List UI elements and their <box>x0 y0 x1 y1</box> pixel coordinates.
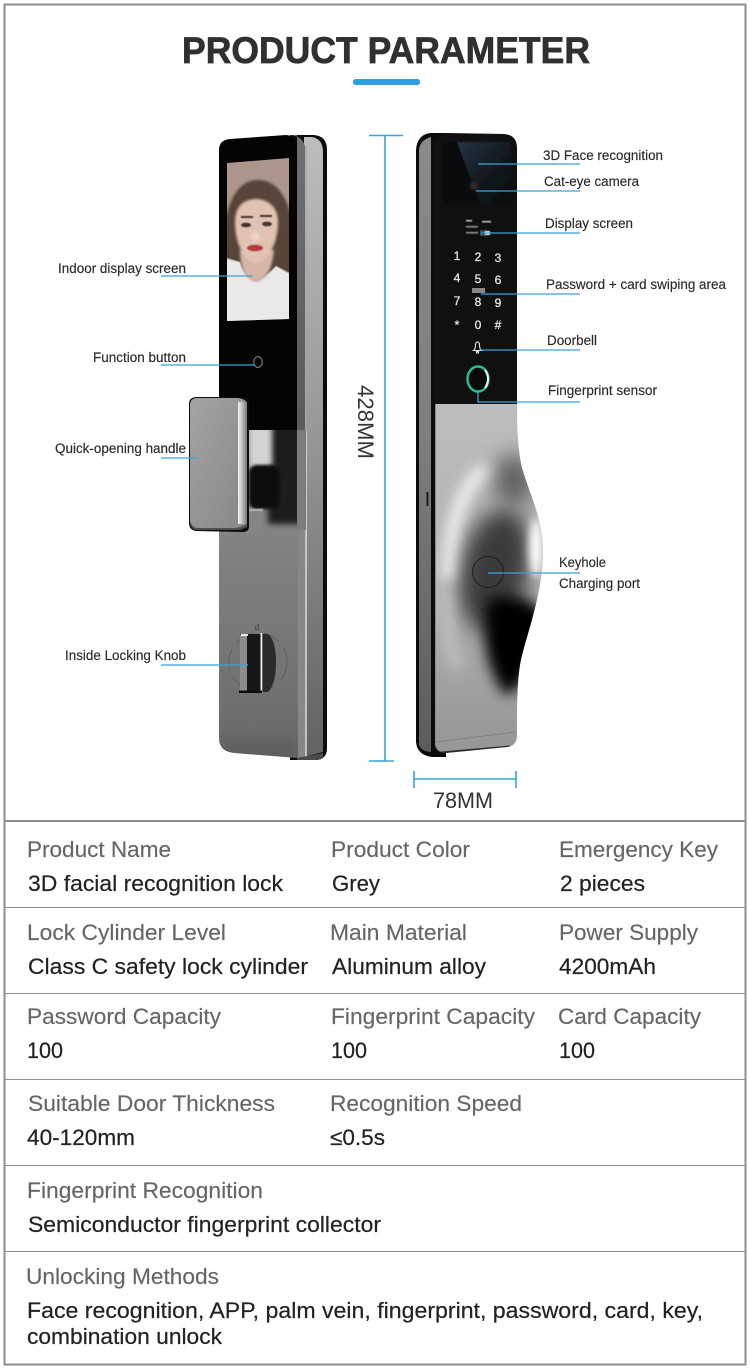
row: cylinder, material, power: Lock Cylinder Level <box>27 920 226 945</box>
right leader lines <box>476 164 580 573</box>
right callout labels: Fingerprint sensor <box>548 383 657 398</box>
fingerprint sensor <box>468 366 488 392</box>
camera window <box>442 142 512 204</box>
keypad: 8 <box>475 295 482 309</box>
right callout labels: Cat-eye camera <box>544 174 639 189</box>
left callout labels: Indoor display screen <box>58 261 186 276</box>
row: cylinder, material, power: 4200mAh <box>559 954 656 979</box>
keypad: 1 <box>454 249 461 263</box>
row: cylinder, material, power <box>27 920 698 979</box>
left callout labels: Function button <box>93 350 186 365</box>
row: cylinder, material, power: Power Supply <box>559 920 698 945</box>
keypad: 5 <box>475 272 482 286</box>
keypad: 6 <box>495 273 502 287</box>
row: door thickness, speed: Recognition Speed <box>330 1091 522 1116</box>
keypad: 0 <box>475 318 482 332</box>
left callout labels: Quick-opening handle <box>55 441 186 456</box>
right callout labels: 3D Face recognition <box>543 148 663 163</box>
right callout labels: Password + card swiping area <box>546 277 726 292</box>
right callout labels: Keyhole <box>559 555 606 570</box>
right callout labels: Display screen <box>545 216 633 231</box>
inside locking knob: d <box>255 623 259 632</box>
row: name, colour, emergency key: 2 pieces <box>560 871 645 896</box>
row: unlocking methods <box>26 1264 703 1349</box>
display screen <box>466 220 491 235</box>
keypad: 9 <box>495 296 502 310</box>
row: fingerprint recognition: Fingerprint Recognition <box>27 1178 263 1203</box>
row: fingerprint recognition: Semiconductor fingerprint collector <box>28 1212 381 1237</box>
keypad: * <box>455 318 460 332</box>
row: name, colour, emergency key: Product Name <box>27 837 171 862</box>
left lock: indoor panel <box>189 135 327 763</box>
row: name, colour, emergency key: Emergency Key <box>559 837 718 862</box>
row: unlocking methods: Unlocking Methods <box>26 1264 219 1289</box>
row: unlocking methods: combination unlock <box>27 1324 223 1349</box>
keypad: # <box>495 318 502 332</box>
row: door thickness, speed: 40-120mm <box>27 1125 135 1150</box>
row: cylinder, material, power: Main Material <box>330 920 467 945</box>
row: capacities: 100 <box>27 1038 63 1063</box>
black face panel <box>219 135 297 431</box>
right callout labels <box>543 148 726 591</box>
row: door thickness, speed: Suitable Door Thickness <box>28 1091 275 1116</box>
right lock: outdoor panel <box>416 133 548 757</box>
left callout labels <box>55 261 186 663</box>
row: capacities: Fingerprint Capacity <box>331 1004 535 1029</box>
lower grey plate <box>219 430 298 758</box>
height dimension 428MM: 428MM <box>353 385 378 459</box>
row: name, colour, emergency key: Grey <box>332 871 380 896</box>
right callout labels: Doorbell <box>547 333 597 348</box>
row: fingerprint recognition <box>27 1178 381 1237</box>
row: name, colour, emergency key: 3D facial recognition lock <box>28 871 284 896</box>
width dimension 78MM: 78MM <box>433 788 493 813</box>
left leader lines <box>161 276 255 665</box>
function button <box>254 357 262 367</box>
row: unlocking methods: Face recognition, APP, palm vein, fingerprint, password, card, key, <box>27 1298 703 1323</box>
keyhole cover <box>472 556 504 588</box>
keypad: 3 <box>495 251 502 265</box>
width dimension 78MM <box>414 771 516 813</box>
row: capacities <box>27 1004 701 1063</box>
side rail <box>416 133 446 757</box>
row: capacities: 100 <box>331 1038 367 1063</box>
black keypad face <box>433 133 517 404</box>
doorbell icon <box>474 342 482 353</box>
keypad <box>454 249 502 332</box>
row: capacities: Password Capacity <box>27 1004 221 1029</box>
row: door thickness, speed: ≤0.5s <box>330 1125 385 1150</box>
title: PRODUCT PARAMETER <box>182 30 590 71</box>
row: name, colour, emergency key: Product Color <box>331 837 470 862</box>
left callout labels: Inside Locking Knob <box>65 648 186 663</box>
right callout labels: Charging port <box>559 576 640 591</box>
row: name, colour, emergency key <box>27 837 718 896</box>
keypad: 4 <box>454 271 461 285</box>
inside locking knob <box>229 623 287 693</box>
specification table rules <box>4 821 746 1252</box>
card swipe mark <box>472 288 485 293</box>
row: door thickness, speed <box>27 1091 522 1150</box>
row: cylinder, material, power: Aluminum alloy <box>332 954 486 979</box>
brushed metal lower body <box>433 402 548 757</box>
keypad: 7 <box>454 294 461 308</box>
quick-opening handle <box>189 397 249 532</box>
row: cylinder, material, power: Class C safety lock cylinder <box>28 954 308 979</box>
title accent bar <box>353 79 420 85</box>
row: capacities: Card Capacity <box>558 1004 701 1029</box>
keypad: 2 <box>475 250 482 264</box>
indoor display with portrait <box>227 158 289 321</box>
outer body and rail <box>290 135 327 760</box>
row: capacities: 100 <box>559 1038 595 1063</box>
